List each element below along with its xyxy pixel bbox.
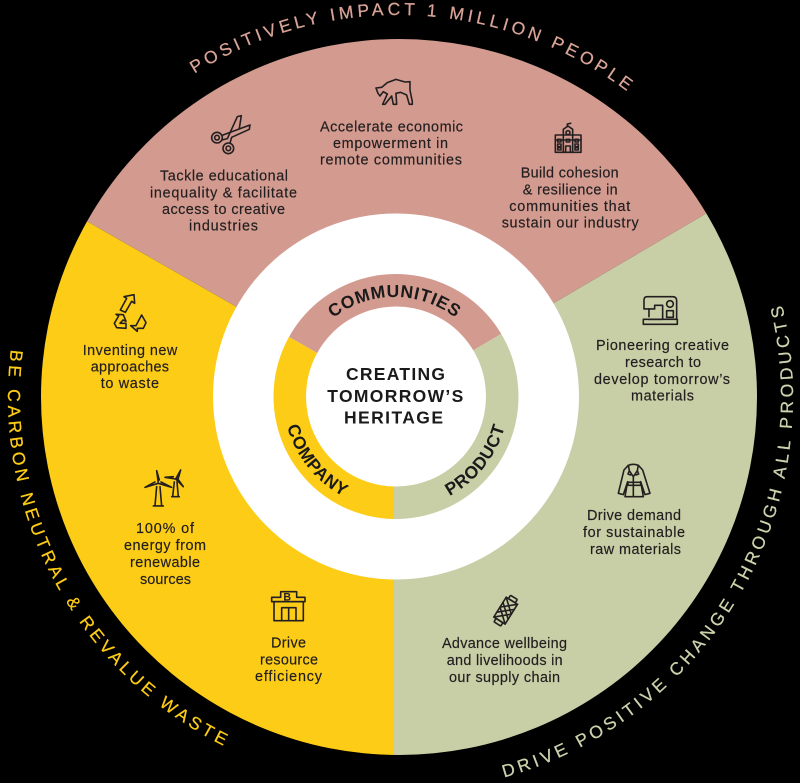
text: pioneering creative research: materials <box>631 388 694 404</box>
icon: scissors <box>212 116 250 154</box>
text: tackle educational inequality: inequality & facilitate <box>150 185 297 201</box>
text: accelerate economic empowerment: Accelerate economic <box>320 120 463 136</box>
text: inventing new approaches to waste: to waste <box>101 376 159 392</box>
centre disc <box>306 306 486 486</box>
text: tackle educational inequality <box>150 169 297 235</box>
text: 100 percent of energy from renewable sources: energy from <box>124 538 206 554</box>
heading: drive positive change through all products: DRIVE POSITIVE CHANGE THROUGH ALL PRODUCTS <box>502 306 794 778</box>
panel: communities <box>87 2 706 307</box>
sector: product <box>394 213 757 755</box>
title: creating tomorrow's heritage: HERITAGE <box>344 407 443 427</box>
text: drive resource efficiency: resource <box>260 653 318 669</box>
ring label: product: PRODUCT <box>444 423 504 496</box>
text: advance wellbeing and livelihoods: Advance wellbeing <box>442 636 567 652</box>
ring segment: company <box>274 337 394 519</box>
text: build cohesion and resilience: sustain our industry <box>502 216 639 232</box>
text: inventing new approaches to waste: Inventing new <box>83 343 178 359</box>
text: pioneering creative research: Pioneering creative <box>596 338 729 354</box>
panel: product <box>394 213 794 778</box>
text: drive demand for sustainable raw materials: raw materials <box>590 542 681 558</box>
white ring <box>213 214 579 580</box>
text: accelerate economic empowerment: remote communities <box>320 153 462 169</box>
ring label: communities: COMMUNITIES <box>328 285 460 316</box>
text: tackle educational inequality: Tackle educational <box>160 169 288 185</box>
icon: sewing machine <box>643 297 677 324</box>
text: drive resource efficiency: Drive <box>271 636 306 652</box>
text: pioneering creative research: develop tomorrow’s <box>594 372 730 388</box>
text: tackle educational inequality: industries <box>189 219 258 235</box>
text: accelerate economic empowerment: empowerment in <box>333 136 448 152</box>
text: 100 percent of energy from renewable sources: renewable <box>130 555 200 571</box>
heading: positively impact 1 million people: POSITIVELY IMPACT 1 MILLION PEOPLE <box>189 2 634 91</box>
ring segment: communities <box>289 274 502 353</box>
ring segment: product <box>394 334 518 519</box>
text: advance wellbeing and livelihoods: our supply chain <box>449 670 560 686</box>
text: drive demand for sustainable raw materials: Drive demand <box>587 508 681 524</box>
icon: shop front: B <box>283 592 291 604</box>
text: accelerate economic empowerment <box>320 120 463 169</box>
text: build cohesion and resilience: & resilience in <box>523 182 618 198</box>
text: pioneering creative research <box>594 338 730 404</box>
icon: coat <box>618 464 650 497</box>
heading: be carbon neutral and revalue waste: BE CARBON NEUTRAL & REVALUE WASTE <box>8 350 228 746</box>
title: creating tomorrow's heritage: TOMORROW’S <box>327 386 463 406</box>
text: build cohesion and resilience <box>502 165 639 232</box>
text: tackle educational inequality: access to creative <box>162 202 285 218</box>
title: creating tomorrow's heritage <box>327 364 463 427</box>
text: pioneering creative research: research to <box>625 355 701 371</box>
title: creating tomorrow's heritage: CREATING <box>346 364 445 384</box>
panel: company <box>8 222 394 755</box>
icon: goat <box>376 79 412 104</box>
text: advance wellbeing and livelihoods <box>442 636 567 686</box>
text: drive resource efficiency <box>255 636 323 685</box>
ring label: company: COMPANY <box>288 424 349 494</box>
text: drive demand for sustainable raw materials: for sustainable <box>583 525 685 541</box>
icon: recycling arrows <box>114 295 146 331</box>
text: 100 percent of energy from renewable sources: 100% of <box>136 521 195 537</box>
icon: shop front <box>272 592 305 621</box>
icon: thread spool <box>492 594 520 627</box>
inner ring <box>274 274 518 519</box>
text: advance wellbeing and livelihoods: and livelihoods in <box>447 653 563 669</box>
text: build cohesion and resilience: communities that <box>509 199 630 215</box>
icon: wind turbines <box>145 470 183 506</box>
text: inventing new approaches to waste: approaches <box>91 360 169 376</box>
text: drive resource efficiency: efficiency <box>255 669 323 685</box>
sector: company <box>41 222 394 755</box>
icon: town hall building <box>555 123 581 152</box>
text: drive demand for sustainable raw materials <box>583 508 685 558</box>
text: build cohesion and resilience: Build cohesion <box>521 165 619 181</box>
text: 100 percent of energy from renewable sources <box>124 521 206 588</box>
sector: communities <box>87 39 706 307</box>
text: inventing new approaches to waste <box>83 343 178 392</box>
text: 100 percent of energy from renewable sources: sources <box>140 572 191 588</box>
